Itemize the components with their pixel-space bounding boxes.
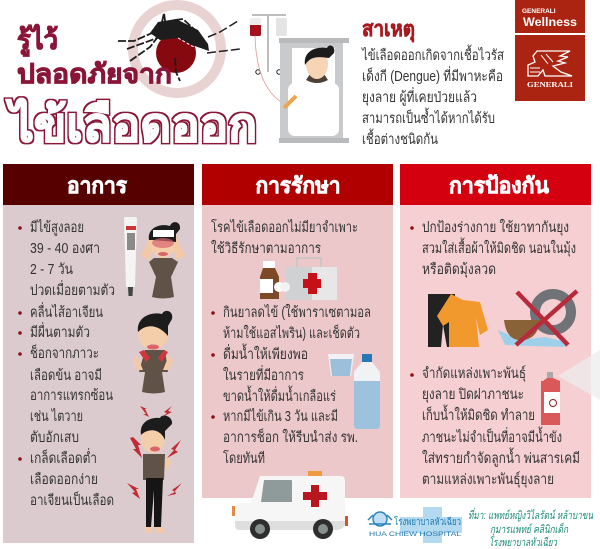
icon: woman with sore throat bbox=[133, 311, 173, 394]
heading: symptoms: อาการ bbox=[67, 173, 127, 198]
treatment list: ห้ามใช้แอสไพริน) และเช็ดตัว bbox=[223, 323, 360, 342]
icon: woman with shock and lightning bolts bbox=[127, 406, 182, 533]
treatment list: ใช้วิธีรักษาตามอาการ bbox=[211, 239, 321, 257]
symptoms list: ตับอักเสบ bbox=[30, 430, 79, 446]
source credit: กุมารแพทย์ คลินิกเด็ก bbox=[490, 522, 569, 536]
treatment list bbox=[211, 218, 371, 467]
source credit bbox=[468, 507, 593, 549]
prevention list: ยุงลาย ปิดฝาภาชนะ bbox=[422, 387, 524, 403]
prevention list: หรือติดมุ้งลวด bbox=[422, 261, 496, 278]
icon: woman with headache bbox=[141, 222, 185, 298]
icon: mosquito in target ring bbox=[118, 5, 240, 93]
treatment list: ขาดน้ำให้ดื่มน้ำเกลือแร่ bbox=[223, 385, 336, 405]
icon: long clothes bbox=[428, 294, 488, 347]
cause text block: สามารถเป็นซ้ำได้หากได้รับ bbox=[362, 107, 495, 127]
prevention list bbox=[410, 218, 580, 488]
icon: thermometer bbox=[124, 217, 137, 296]
cause text block: ยุงลาย ผู้ที่เคยป่วยแล้ว bbox=[362, 87, 477, 106]
panel: prevention bbox=[400, 164, 600, 498]
symptoms list: เลือดข้น อาจมี bbox=[30, 367, 102, 384]
panel: symptoms bbox=[3, 164, 194, 543]
icon: iv stand and patient in bed bbox=[250, 14, 349, 143]
panel: treatment bbox=[202, 164, 393, 539]
icon: water glass and bottle bbox=[328, 354, 380, 429]
treatment list: โดยทันที bbox=[223, 449, 265, 467]
cause text block: ไข้เลือดออกเกิดจากเชื้อไวรัส bbox=[361, 44, 504, 64]
logo: generali lion bbox=[515, 35, 585, 101]
treatment list: อาการช็อก ให้รีบนำส่ง รพ. bbox=[223, 427, 358, 446]
prevention list: เก็บน้ำให้มิดชิด ทำลาย bbox=[422, 404, 535, 424]
logo: hua chiew hospital: HUA CHIEW HOSPITAL bbox=[369, 531, 461, 538]
source credit: โรงพยาบาลหัวเฉียว bbox=[489, 536, 558, 549]
cause text block: เด็งกี (Dengue) ที่มีพาหะคือ bbox=[362, 66, 503, 85]
symptoms list: มีไข้สูงลอย bbox=[30, 218, 84, 236]
prevention list: ปกป้องร่างกาย ใช้ยาทากันยุง bbox=[422, 218, 569, 236]
symptoms list: 39 - 40 องศา bbox=[30, 241, 100, 257]
heading: treatment: การรักษา bbox=[256, 173, 340, 198]
title bbox=[5, 24, 257, 151]
symptoms list: อาเจียนเป็นเลือด bbox=[30, 490, 114, 509]
treatment list: ในรายที่มีอาการ bbox=[223, 365, 304, 384]
treatment list: กินยาลดไข้ (ใช้พาราเซตามอล bbox=[223, 303, 371, 321]
icon: insect spray can bbox=[541, 350, 600, 425]
symptoms list: มีผื่นตามตัว bbox=[30, 322, 90, 341]
prevention list: จำกัดแหล่งเพาะพันธุ์ bbox=[422, 365, 526, 382]
symptoms list: ช็อกจากภาวะ bbox=[30, 343, 99, 362]
icon: crossed out water container and tyre bbox=[498, 291, 577, 347]
title: รู้ไว้ bbox=[17, 24, 58, 57]
logo: hua chiew hospital: โรงพยาบาลหัวเฉียว bbox=[394, 515, 461, 528]
symptoms list: ปวดเมื่อยตามตัว bbox=[30, 280, 115, 299]
symptoms list: เลือดออกง่าย bbox=[30, 471, 98, 488]
icon: ambulance bbox=[232, 471, 348, 539]
prevention list: ตามแหล่งเพาะพันธุ์ยุงลาย bbox=[422, 471, 554, 488]
cause text block: เชื้อต่างชนิดกัน bbox=[362, 128, 438, 148]
symptoms list bbox=[18, 218, 115, 509]
symptoms list: เกล็ดเลือดต่ำ bbox=[30, 448, 97, 467]
treatment list: โรคไข้เลือดออกไม่มียาจำเพาะ bbox=[211, 218, 358, 236]
title: ไข้เลือดออก bbox=[5, 97, 257, 151]
symptoms list: คลื่นไส้อาเจียน bbox=[30, 302, 103, 321]
symptoms list: 2 - 7 วัน bbox=[30, 262, 73, 278]
logo: generali wellness bbox=[515, 0, 585, 33]
icon: medicine bottle and first aid kit bbox=[260, 258, 337, 300]
logo: generali lion: GENERALI bbox=[527, 80, 573, 89]
cause text block bbox=[361, 18, 504, 148]
treatment list: ดื่มน้ำให้เพียงพอ bbox=[223, 343, 308, 363]
title: ปลอดภัยจาก bbox=[17, 59, 172, 89]
logo: generali wellness: Wellness bbox=[523, 17, 577, 29]
logo: hua chiew hospital bbox=[368, 507, 462, 543]
prevention list: ภาชนะไม่จำเป็นที่อาจมีน้ำขัง bbox=[422, 426, 562, 446]
cause text block: สาเหตุ bbox=[362, 18, 415, 43]
heading: prevention: การป้องกัน bbox=[449, 173, 549, 198]
logo: generali wellness: GENERALI bbox=[522, 8, 556, 15]
symptoms list: อาการแทรกซ้อน bbox=[30, 387, 113, 404]
symptoms list: เช่น ไตวาย bbox=[30, 407, 83, 425]
treatment list: หากมีไข้เกิน 3 วัน และมี bbox=[223, 407, 338, 425]
